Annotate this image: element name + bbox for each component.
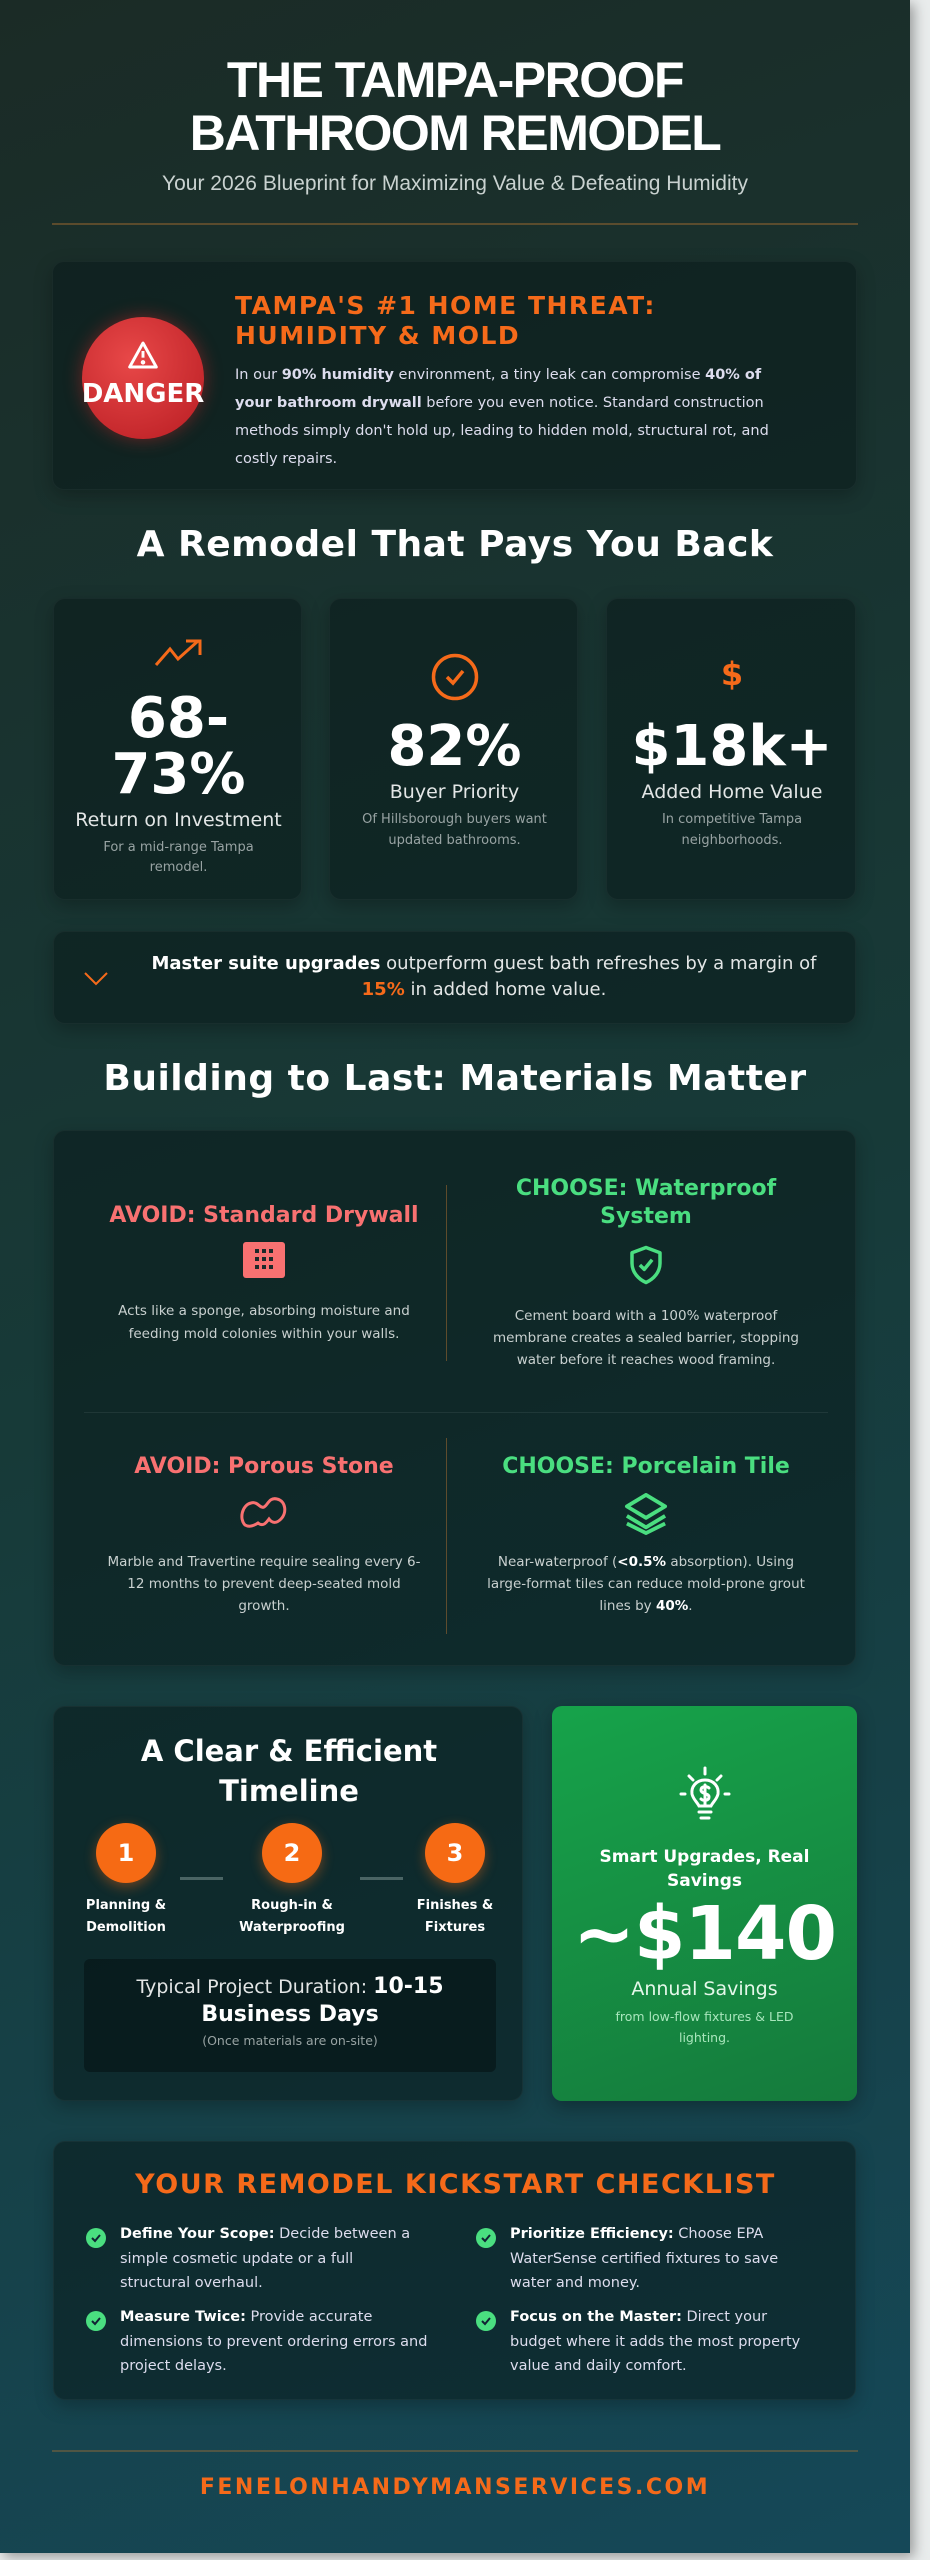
stat card: buyer priority: Of Hillsborough buyers want updated bathrooms. — [362, 812, 547, 848]
duration box: Typical Project Duration: 10-15 — [136, 1974, 444, 1999]
step 1 — [86, 1820, 166, 1935]
footer: website: FENELONHANDYMANSERVICES.COM — [200, 2475, 710, 2500]
title: BATHROOM REMODEL — [190, 105, 720, 161]
icon: check circle — [432, 654, 478, 700]
heading: humidity threat: TAMPA'S #1 HOME THREAT: — [235, 291, 656, 320]
icon: danger circle: DANGER — [82, 379, 204, 409]
number: ~$140: ~$140 — [573, 1891, 836, 1977]
item: choose porcelain — [487, 1454, 805, 1614]
heading: humidity threat — [235, 291, 656, 350]
item: avoid drywall: Acts like a sponge, absorbing moisture and feeding mold colonies within your walls. — [118, 1303, 410, 1342]
title — [190, 52, 720, 161]
icon: stone — [240, 1497, 286, 1528]
stat card: ROI: Return on Investment — [75, 809, 282, 831]
duration box: (Once materials are on-site) — [202, 2033, 378, 2048]
step 1: Planning & — [86, 1898, 166, 1913]
step 1: 1 — [118, 1839, 134, 1867]
item: choose porcelain: CHOOSE: Porcelain Tile — [502, 1454, 790, 1479]
icon: shield — [630, 1246, 662, 1284]
duration box — [84, 1959, 496, 2072]
panel: danger — [52, 261, 857, 490]
step 2: Waterproofing — [239, 1920, 345, 1935]
panel: checklist — [53, 2141, 856, 2400]
number: $18k+: $18k+ — [631, 714, 833, 779]
step 2 — [239, 1820, 345, 1935]
panel: savings — [552, 1706, 857, 2101]
number: ROI — [111, 686, 246, 807]
stat card: ROI: For a mid-range Tampa remodel. — [103, 840, 254, 875]
item: efficiency: Prioritize Efficiency: Choose EPA WaterSense certified fixtures to save water and money. — [510, 2226, 778, 2291]
step 2: Rough-in & — [251, 1898, 333, 1913]
item: measure twice: Measure Twice: Provide accurate dimensions to prevent ordering errors and project delays. — [120, 2309, 427, 2374]
item: avoid drywall: AVOID: Standard Drywall — [109, 1203, 419, 1228]
heading: humidity threat: HUMIDITY & MOLD — [235, 321, 520, 350]
heading: checklist: YOUR REMODEL KICKSTART CHECKLIST — [135, 2169, 776, 2200]
heading: smart upgrades: Smart Upgrades, Real Savings — [600, 1847, 809, 1891]
heading: timeline: A Clear & Efficient — [141, 1734, 437, 1768]
item: avoid stone: AVOID: Porous Stone — [134, 1454, 394, 1479]
stat card: home value: Added Home Value — [642, 781, 822, 803]
icon: layers — [624, 1493, 668, 1535]
duration box: Business Days — [201, 2002, 379, 2027]
number: ROI: 73% — [111, 742, 246, 807]
step 3: Finishes & — [417, 1898, 493, 1913]
heading: timeline: Timeline — [219, 1774, 359, 1808]
step 2: 2 — [284, 1839, 300, 1867]
text: threat description: In our 90% humidity environment, a tiny leak can compromise 40% of your bathroom drywall before you even notice. Standard construction methods simply don't hold up, leading to hidden mold, structural rot, and costly repairs. — [235, 367, 769, 467]
step 3: 3 — [447, 1839, 463, 1867]
title: THE TAMPA-PROOF — [227, 52, 683, 108]
item: focus master: Focus on the Master: Direct your budget where it adds the most property value and daily comfort. — [510, 2309, 800, 2374]
icon: dollar: $ — [721, 655, 743, 693]
panel: savings: from low-flow fixtures & LED lighting. — [616, 2009, 793, 2045]
panel: savings: Annual Savings — [631, 1978, 778, 2000]
item: choose porcelain: Near-waterproof (<0.5% absorption). Using large-format tiles can reduce mold-prone grout lines by 40%. — [487, 1554, 805, 1614]
item: choose waterproof: System — [600, 1204, 692, 1229]
step 3: Fixtures — [425, 1920, 485, 1935]
number: ROI: 68- — [128, 686, 229, 751]
item: avoid drywall — [109, 1203, 419, 1342]
icon: danger circle — [82, 317, 204, 439]
step 1: Demolition — [86, 1920, 166, 1935]
icon: drywall — [243, 1242, 285, 1278]
heading: timeline — [141, 1734, 437, 1808]
number: 82%: 82% — [387, 714, 522, 779]
panel: timeline — [53, 1706, 523, 2101]
stat card: home value: In competitive Tampa neighborhoods. — [662, 812, 802, 848]
icon: chevron — [84, 972, 108, 986]
heading: materials: Building to Last: Materials Matter — [103, 1058, 807, 1099]
item: avoid stone — [108, 1454, 420, 1614]
item: choose waterproof: CHOOSE: Waterproof — [516, 1176, 776, 1201]
icon: bulb dollar — [680, 1766, 730, 1820]
item: avoid stone: Marble and Travertine require sealing every 6-12 months to prevent deep-seated mold growth. — [108, 1554, 420, 1614]
stat card: buyer priority — [329, 598, 578, 900]
panel: materials — [53, 1130, 856, 1666]
stat card: home value — [606, 598, 856, 900]
callout: master suite: Master suite upgrades outperform guest bath refreshes by a margin of 15% in added home value. — [152, 953, 816, 1000]
heading: pays you back: A Remodel That Pays You Back — [137, 524, 773, 565]
item: define scope: Define Your Scope: Decide between a simple cosmetic update or a full structural overhaul. — [120, 2226, 410, 2291]
icon: trend up — [155, 640, 202, 666]
item: choose waterproof — [493, 1176, 799, 1368]
stat card: buyer priority: Buyer Priority — [390, 781, 519, 803]
stat card: ROI — [53, 598, 302, 900]
callout: master suite — [53, 931, 856, 1024]
subtitle: Your 2026 Blueprint for Maximizing Value & Defeating Humidity — [162, 172, 748, 195]
item: choose waterproof: Cement board with a 100% waterproof membrane creates a sealed barrier, stopping water before it reaches wood framing. — [493, 1308, 799, 1368]
step 3 — [417, 1820, 493, 1935]
